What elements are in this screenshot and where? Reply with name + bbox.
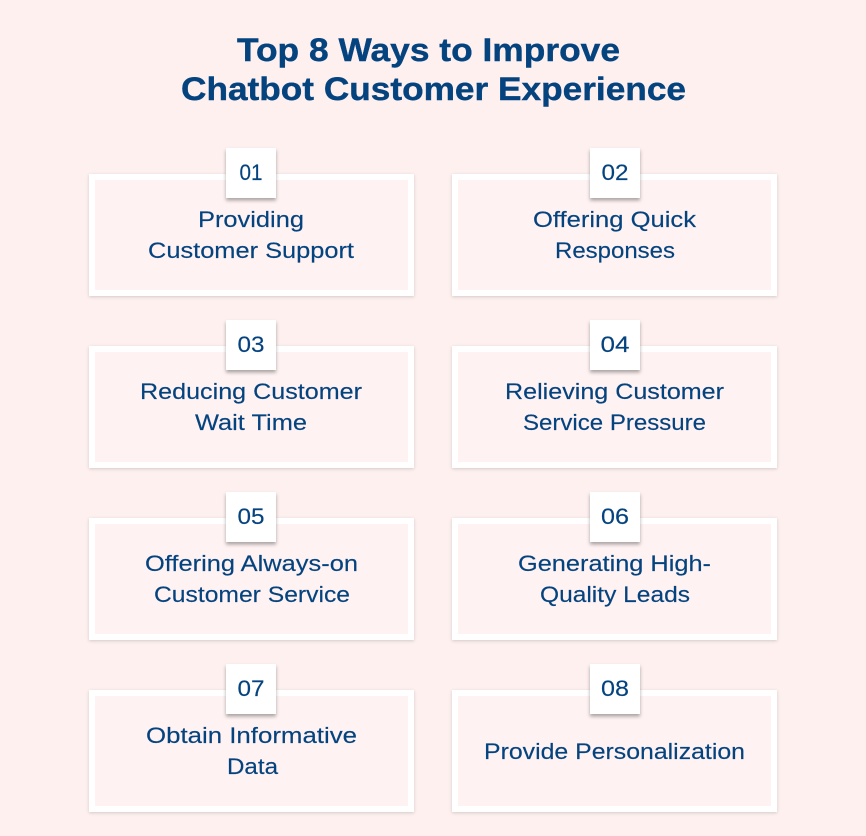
panel: 04 Relieving Customer Service Pressure: Service Pressure	[523, 410, 706, 435]
panel: 04 Relieving Customer Service Pressure: Relieving Customer	[505, 379, 725, 404]
title: Top 8 Ways to Improve	[237, 32, 620, 68]
panel: 05 Offering Always-on Customer Service: Customer Service	[154, 582, 350, 607]
panel: 07 Obtain Informative Data: Data	[227, 754, 279, 779]
panel: 01 Providing Customer Support: Providing	[198, 207, 304, 232]
panel: 04 Relieving Customer Service Pressure: 04	[600, 332, 630, 357]
panel: 08 Provide Personalization: 08	[601, 676, 629, 701]
panel: 01 Providing Customer Support: 01	[240, 160, 262, 185]
panel: 02 Offering Quick Responses: 02	[602, 160, 628, 185]
panel: 06 Generating High-Quality Leads: Quality Leads	[540, 582, 690, 607]
panel: 06 Generating High-Quality Leads: 06	[601, 504, 629, 529]
panel: 03 Reducing Customer Wait Time: Reducing Customer	[140, 379, 363, 404]
panel: 06 Generating High-Quality Leads: Generating High-	[518, 551, 711, 576]
panel: 03 Reducing Customer Wait Time: Wait Time	[195, 410, 307, 435]
panel: 05 Offering Always-on Customer Service: Offering Always-on	[145, 551, 358, 576]
panel: 08 Provide Personalization: Provide Personalization	[484, 739, 745, 764]
panel: 05 Offering Always-on Customer Service: 05	[238, 504, 264, 529]
panel: 07 Obtain Informative Data: Obtain Informative	[146, 723, 357, 748]
panel: 03 Reducing Customer Wait Time	[89, 320, 414, 468]
panel: 02 Offering Quick Responses	[452, 148, 777, 296]
panel: 02 Offering Quick Responses: Offering Quick	[533, 207, 697, 232]
panel: 06 Generating High-Quality Leads	[452, 492, 777, 640]
panel: 08 Provide Personalization	[452, 664, 777, 812]
panel: 02 Offering Quick Responses: Responses	[555, 238, 675, 263]
panel: 07 Obtain Informative Data: 07	[238, 676, 264, 701]
title	[181, 32, 686, 107]
panel: 05 Offering Always-on Customer Service	[89, 492, 414, 640]
panel: 03 Reducing Customer Wait Time: 03	[238, 332, 264, 357]
panel: 07 Obtain Informative Data	[89, 664, 414, 812]
panel: 01 Providing Customer Support	[89, 148, 414, 296]
panel: 01 Providing Customer Support: Customer Support	[148, 238, 355, 263]
panel: 04 Relieving Customer Service Pressure	[452, 320, 777, 468]
title: Chatbot Customer Experience	[181, 71, 686, 107]
